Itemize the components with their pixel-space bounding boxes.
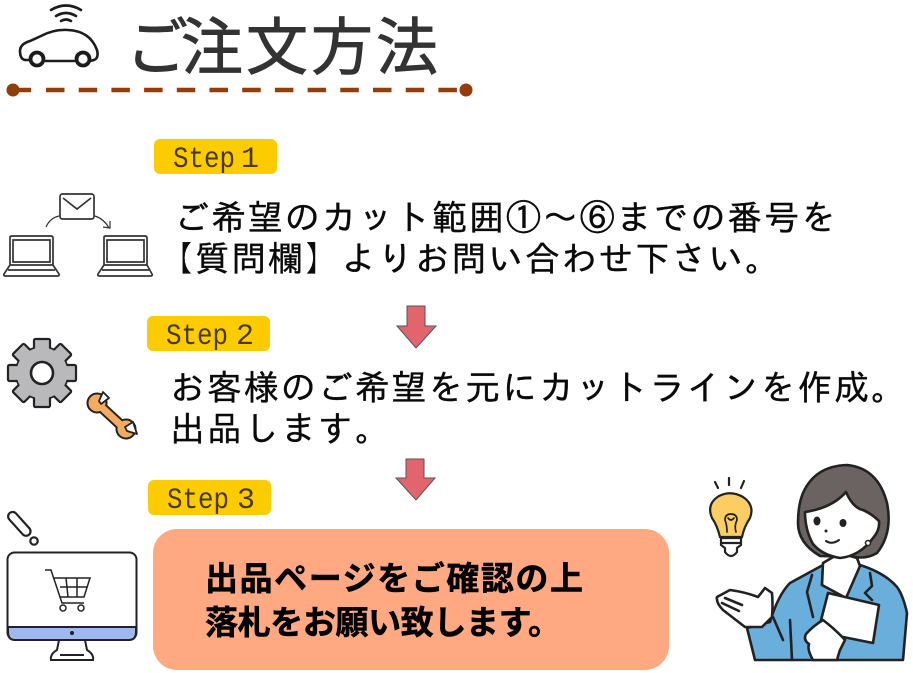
illustration: woman presenting [717, 465, 907, 660]
step 2 text: お客様のご希望を元にカットラインを作成。 [170, 369, 906, 408]
hair [798, 465, 889, 558]
step 1 badge: 1 [241, 143, 259, 177]
face [805, 492, 879, 558]
callout text: 出品ページをご確認の上 [205, 560, 583, 597]
step 1 text [158, 199, 836, 279]
step 3 badge [148, 480, 271, 518]
step 1 text: ご希望のカット範囲①～⑥までの番号を [174, 199, 836, 238]
step 2 badge: Step [166, 320, 228, 354]
icon: wrench [88, 392, 137, 438]
step 2 badge [147, 316, 270, 354]
title: ご注文方法 [126, 14, 438, 83]
neck and blouse [822, 553, 860, 598]
panel: confirmation callout [153, 529, 669, 670]
arrow 2 [396, 459, 435, 500]
hand holding tablet [805, 620, 845, 660]
lapels and sleeve lines [773, 573, 872, 660]
callout text [205, 560, 583, 641]
jacket [747, 565, 907, 660]
open hand [717, 588, 772, 627]
icon: exclamation mark [6, 510, 38, 545]
icon: light bulb [710, 478, 751, 556]
icon: mail between laptops [4, 194, 152, 276]
step 3 badge: Step [167, 484, 229, 518]
icon: connected car [20, 6, 98, 66]
icon: monitor with cart [8, 552, 136, 660]
callout text: 落札をお願い致します。 [205, 604, 561, 641]
step 2 badge: 2 [236, 320, 254, 354]
eyes and mouth [814, 516, 846, 532]
icon: gear [8, 339, 76, 407]
arrow 1 [397, 306, 436, 348]
title divider [6, 84, 472, 96]
step 2 text: 出品します。 [170, 410, 390, 449]
tablet [818, 593, 879, 643]
step 3 badge: 3 [237, 484, 255, 518]
step 1 text: 【質問欄】よりお問い合わせ下さい。 [158, 240, 780, 279]
step 2 text [170, 369, 906, 449]
step 1 badge: Step [173, 143, 235, 177]
step 1 badge [154, 139, 277, 177]
